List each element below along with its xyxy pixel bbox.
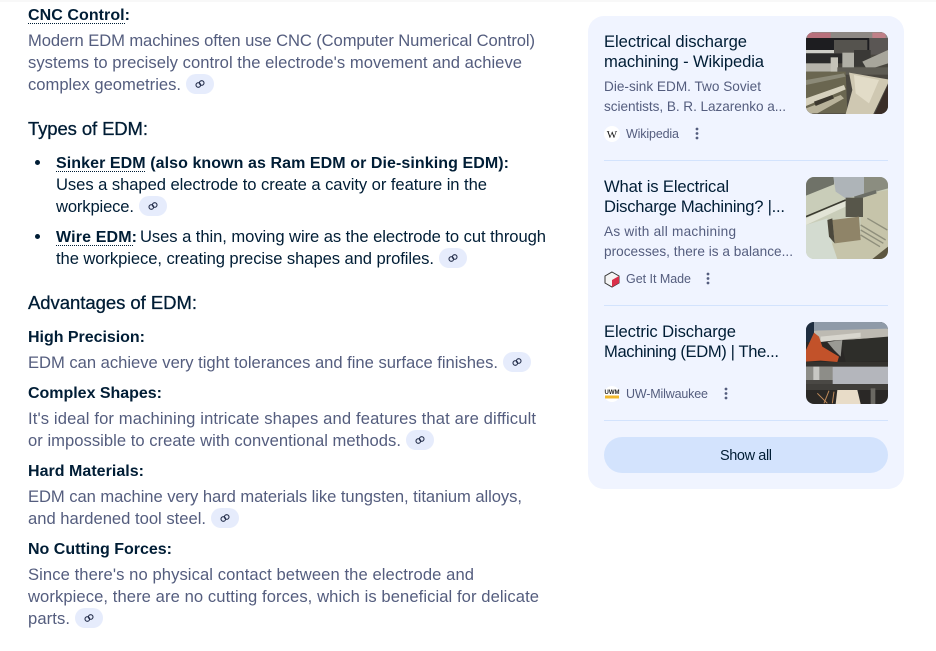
panel: sources [588,16,904,489]
advantage: Complex Shapes: It's ideal for machining intricate shapes and features that are difficult [28,409,536,428]
source card: Wikipedia: machining - Wikipedia [604,52,765,71]
source card: UW-Milwaukee: Machining (EDM) | The... [604,342,779,361]
icon: more menu [707,273,709,284]
source card: Get It Made [604,177,888,287]
icon: Get It Made cube [605,272,619,287]
advantage: Complex Shapes [28,385,536,450]
icon: UWM logo [604,386,620,402]
icon: more menu [696,128,698,139]
source card: Wikipedia: Wikipedia [626,127,679,141]
icon: Wikipedia logo: W [607,129,618,141]
list item: Sinker EDM: Uses a shaped electrode to create a cavity or feature in the [56,175,487,194]
advantage: Complex Shapes: or impossible to create with conventional methods. [28,431,401,450]
source card: UW-Milwaukee: UW-Milwaukee [626,387,708,401]
text block: CNC description [28,31,535,94]
list item: Wire EDM: Wire EDM: [56,229,137,246]
icon: UWM logo: UWM [604,390,620,396]
heading: Advantages of EDM: Advantages of EDM: [28,292,197,313]
source card: UW-Milwaukee [604,322,888,404]
icon: more menu [725,388,727,399]
list item: Sinker EDM: workpiece. [55,197,134,216]
list item: Wire EDM [35,227,546,268]
source card: Get It Made: Get It Made [626,272,691,286]
source card: Wikipedia: Electrical discharge [604,32,747,51]
thumbnail: sparks [806,322,888,404]
advantage: High Precision: High Precision: [28,329,145,346]
advantage: Complex Shapes: Complex Shapes: [28,385,162,402]
button: Show all [604,437,888,473]
source card: Get It Made: processes, there is a balance... [604,244,793,259]
advantage: High Precision: EDM can achieve very tight tolerances and fine surface finishes. [28,353,498,372]
button: Show all: Show all [720,448,772,464]
source card: Wikipedia [604,32,888,142]
icon: Wikipedia logo [604,126,620,142]
source card: Wikipedia: Die-sink EDM. Two Soviet [604,79,761,94]
thumbnail: EDM machine [806,32,888,114]
advantage: No Cutting Forces: No Cutting Forces: [28,541,172,558]
advantage: No Cutting Forces: workpiece, there are no cutting forces, which is beneficial for delicate [27,587,539,606]
section: CNC Control [28,7,535,94]
advantage: No Cutting Forces: parts. [28,609,70,628]
list item: Wire EDM: the workpiece, creating precise shapes and profiles. [56,249,434,268]
source card: Wikipedia: scientists, B. R. Lazarenko a... [604,99,786,114]
advantage: Hard Materials: and hardened tool steel. [28,509,206,528]
advantage: No Cutting Forces [27,541,539,628]
text block: CNC description: Modern EDM machines often use CNC (Computer Numerical Control) [28,31,535,50]
source card: Get It Made: Discharge Machining? |... [604,197,785,216]
text block: CNC description: complex geometries. [28,75,181,94]
thumbnail: wire cutting [806,177,888,259]
source card: Get It Made: As with all machining [604,224,736,239]
text block: CNC description: systems to precisely control the electrode's movement and achieve [28,53,522,72]
advantage: High Precision [28,329,531,372]
icon: link chip [186,74,214,94]
heading: CNC Control: CNC Control: [28,7,130,24]
list: EDM types [35,155,546,268]
source card: Get It Made: What is Electrical [604,177,729,196]
advantage: No Cutting Forces: Since there's no physical contact between the electrode and [28,565,474,584]
advantage: Hard Materials: EDM can machine very hard materials like tungsten, titanium alloys, [28,487,522,506]
heading: Types of EDM: Types of EDM: [28,118,148,139]
list item: Sinker EDM: Sinker EDM (also known as Ram EDM or Die-sinking EDM): [56,155,509,172]
source card: UW-Milwaukee: Electric Discharge [604,322,736,341]
list item: Sinker EDM [35,155,509,216]
list item: Wire EDM: Uses a thin, moving wire as the electrode to cut through [140,227,546,246]
advantage: Hard Materials [28,463,522,528]
advantage: Hard Materials: Hard Materials: [28,463,144,480]
